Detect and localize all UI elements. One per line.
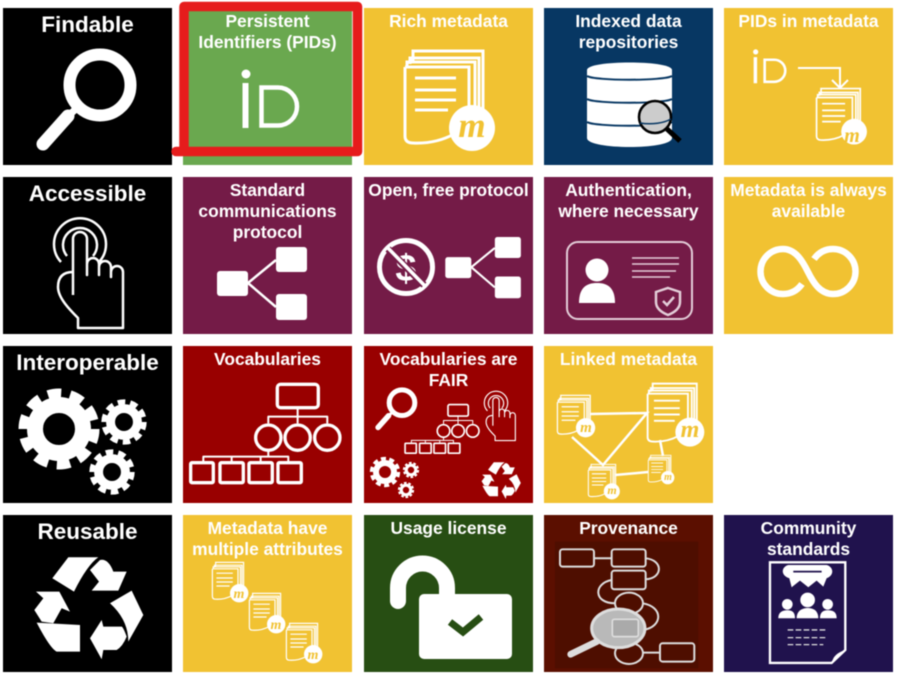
heading: Persistent Identifiers (PIDs): Identifiers (PIDs) — [198, 32, 337, 52]
heading: Findable: Findable — [41, 12, 134, 37]
tile background — [544, 515, 713, 672]
heading: Provenance: Provenance — [579, 518, 678, 538]
heading: Indexed data repositories: repositories — [579, 32, 678, 52]
heading: Vocabularies are FAIR: FAIR — [429, 370, 469, 390]
heading: Persistent Identifiers (PIDs): Persistent — [225, 11, 310, 31]
icon: hierarchy chart — [191, 384, 340, 483]
panel: Standard communications protocol — [183, 177, 352, 334]
icon: small recycle — [482, 462, 521, 499]
tile background — [3, 346, 172, 503]
panel: Vocabularies are FAIR — [364, 346, 533, 503]
heading: Community standards: standards — [767, 539, 850, 559]
icon: metadata documents — [405, 51, 495, 151]
icon: infinity — [760, 249, 856, 294]
icon: linked documents: m — [580, 420, 592, 436]
callout: red highlight around Persistent Identifiers — [176, 6, 358, 152]
tile background — [183, 177, 352, 334]
icon: recycle symbol — [34, 557, 143, 659]
heading: Metadata have multiple attributes: multiple attributes — [192, 539, 343, 559]
heading: Standard communications protocol: communications — [198, 201, 337, 221]
panel: Linked metadata — [544, 346, 713, 503]
heading: Vocabularies are FAIR: Vocabularies are — [380, 349, 518, 369]
heading: Indexed data repositories: Indexed data — [575, 11, 682, 31]
panel: Interoperable category — [3, 346, 172, 503]
heading: Community standards: Community — [761, 518, 857, 538]
icon: three metadata documents: m — [234, 587, 245, 602]
icon: iD to metadata arrow: m — [844, 125, 860, 147]
icon: no dollar sign — [380, 240, 432, 294]
icon: gears — [23, 393, 144, 492]
icon: database with magnifier — [587, 62, 680, 147]
icon: metadata documents: m — [458, 106, 486, 145]
panel: Reusable category — [3, 515, 172, 672]
heading: PIDs in metadata: PIDs in metadata — [738, 11, 879, 31]
icon: community document — [770, 562, 846, 663]
icon: network nodes — [445, 237, 521, 298]
panel: Provenance — [544, 515, 713, 672]
icon: ID card — [567, 242, 692, 319]
tile background — [544, 8, 713, 165]
heading: Metadata have multiple attributes: Metadata have — [208, 518, 328, 538]
heading: Rich metadata: Rich metadata — [389, 11, 508, 31]
icon: linked documents: m — [681, 417, 699, 443]
heading: Standard communications protocol: protocol — [233, 222, 302, 242]
tile background — [364, 177, 533, 334]
tile background — [544, 177, 713, 334]
tile background — [724, 177, 893, 334]
icon: iD to metadata arrow — [753, 49, 867, 147]
icon: small hierarchy — [405, 405, 479, 453]
panel: Authentication, where necessary — [544, 177, 713, 334]
tile background — [3, 515, 172, 672]
icon: touching hand — [54, 218, 123, 328]
icon: network nodes — [217, 247, 307, 320]
tile background — [364, 346, 533, 503]
icon: three metadata documents: m — [271, 618, 282, 633]
heading: Linked metadata: Linked metadata — [560, 349, 697, 369]
heading: Vocabularies: Vocabularies — [214, 349, 321, 369]
tile background — [183, 515, 352, 672]
heading: Open, free protocol: Open, free protocol — [368, 180, 529, 200]
icon: linked documents: m — [607, 483, 617, 497]
tile background — [3, 8, 172, 165]
panel: Indexed data repositories — [544, 8, 713, 165]
heading: Authentication, where necessary: Authentication, — [565, 180, 692, 200]
panel: Rich metadata — [364, 8, 533, 165]
icon: linked documents: m — [664, 472, 672, 483]
panel: Community standards — [724, 515, 893, 672]
heading: Standard communications protocol: Standard — [230, 180, 305, 200]
panel: Findable category — [3, 8, 172, 165]
icon: small gears — [372, 458, 418, 497]
heading: Metadata is always available: Metadata is always — [730, 180, 887, 200]
heading: Metadata is always available: available — [772, 201, 846, 221]
icon: linked documents — [557, 384, 704, 499]
heading: Usage license: Usage license — [390, 518, 507, 538]
heading: Accessible: Accessible — [29, 181, 146, 206]
tile background — [544, 346, 713, 503]
panel: PIDs in metadata — [724, 8, 893, 165]
tile background — [364, 8, 533, 165]
panel: Persistent Identifiers — [183, 8, 352, 165]
tile background — [724, 8, 893, 165]
heading: Reusable: Reusable — [37, 519, 138, 544]
icon: open padlock — [398, 564, 512, 659]
icon: provenance graph with magnifier — [555, 542, 698, 668]
icon: three metadata documents: m — [308, 648, 319, 663]
icon: small hand — [484, 391, 515, 441]
heading: Interoperable: Interoperable — [16, 350, 159, 375]
icon: no dollar sign: $ — [395, 248, 417, 290]
panel: Open, free protocol — [364, 177, 533, 334]
icon: three metadata documents — [212, 562, 322, 663]
tile background — [364, 515, 533, 672]
tile background — [183, 346, 352, 503]
panel: Usage license — [364, 515, 533, 672]
panel: Vocabularies — [183, 346, 352, 503]
tile background — [724, 515, 893, 672]
panel: Accessible category — [3, 177, 172, 334]
tile background — [3, 177, 172, 334]
heading: Authentication, where necessary: where necessary — [557, 201, 699, 221]
panel: Metadata is always available — [724, 177, 893, 334]
icon: magnifying glass — [43, 54, 130, 144]
icon: small magnifier — [378, 390, 415, 427]
panel: Metadata have multiple attributes — [183, 515, 352, 672]
tile background — [183, 8, 352, 165]
icon: iD logo — [242, 70, 297, 128]
